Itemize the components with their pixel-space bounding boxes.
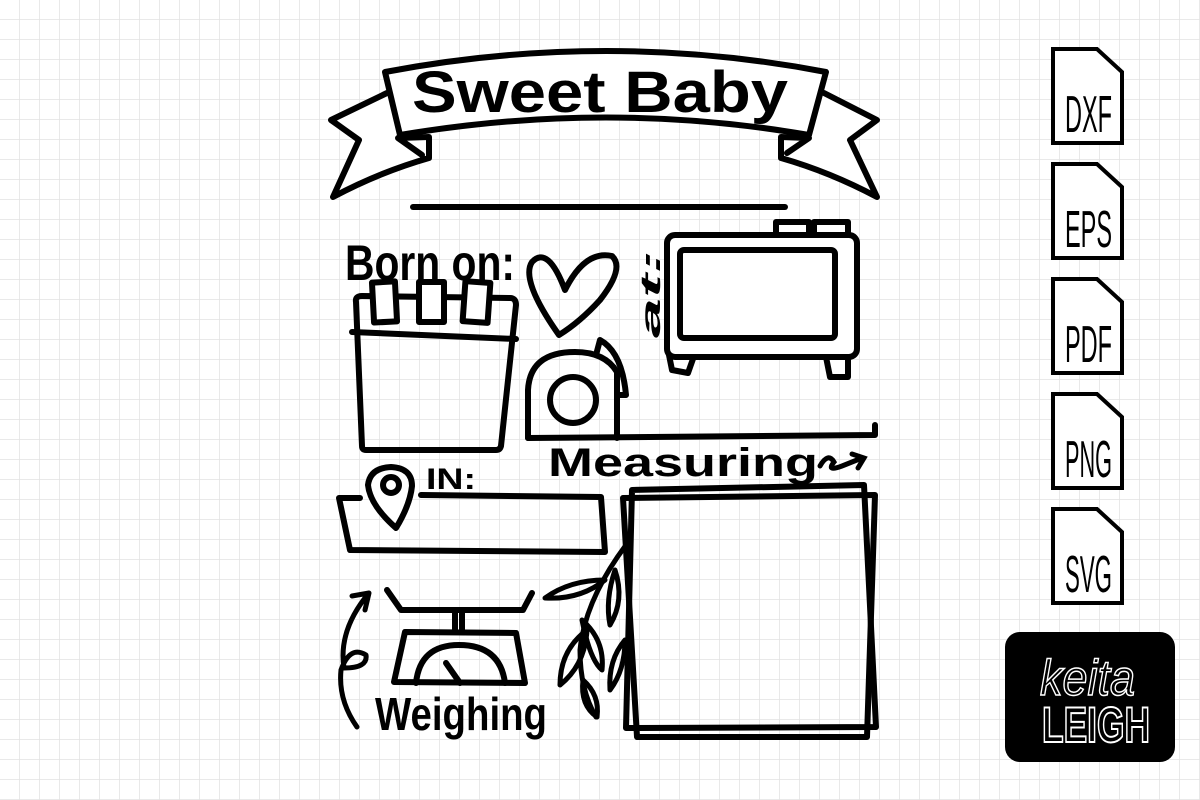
name line bbox=[413, 204, 785, 210]
icon: heart bbox=[529, 255, 616, 335]
title text: Sweet Baby bbox=[412, 60, 788, 125]
logo: keita leigh: keita bbox=[1040, 650, 1135, 706]
file icon: EPS bbox=[1053, 164, 1122, 259]
file icon: PDF bbox=[1053, 279, 1122, 374]
location box bbox=[339, 495, 605, 552]
ribbon right tail bbox=[781, 93, 877, 197]
logo: keita leigh: LEIGH bbox=[1042, 697, 1150, 753]
file icon: PNG: PNG bbox=[1065, 431, 1112, 489]
icon: leafy branch bbox=[545, 545, 626, 717]
file icon: EPS: EPS bbox=[1065, 201, 1112, 259]
icon: tape measure bbox=[528, 340, 875, 438]
file icon: PNG bbox=[1053, 394, 1122, 489]
text: Measuring bbox=[548, 441, 864, 485]
icon: tv bbox=[667, 222, 857, 377]
text: IN: IN: bbox=[426, 463, 476, 496]
logo: keita leigh bbox=[1005, 632, 1175, 762]
ribbon center bbox=[385, 51, 826, 135]
banner: title ribbon bbox=[331, 51, 877, 197]
icon: calendar bbox=[352, 281, 516, 450]
file icon: DXF: DXF bbox=[1065, 86, 1112, 144]
arrow: curl bbox=[341, 593, 369, 727]
text: Born on: Born on: bbox=[345, 235, 515, 291]
file icon: DXF bbox=[1053, 49, 1122, 144]
text: at (rotated): at: bbox=[635, 250, 666, 338]
file icon: SVG: SVG bbox=[1065, 546, 1112, 604]
file icon: PDF: PDF bbox=[1065, 316, 1112, 374]
icon: scale bbox=[387, 590, 532, 683]
text: Measuring: Measuring bbox=[548, 441, 818, 485]
icon: location pin bbox=[368, 467, 412, 528]
text: Weighing: Weighing bbox=[375, 688, 547, 740]
photo frame bbox=[623, 485, 876, 737]
ribbon left tail bbox=[331, 93, 429, 197]
file icon: SVG bbox=[1053, 509, 1122, 604]
